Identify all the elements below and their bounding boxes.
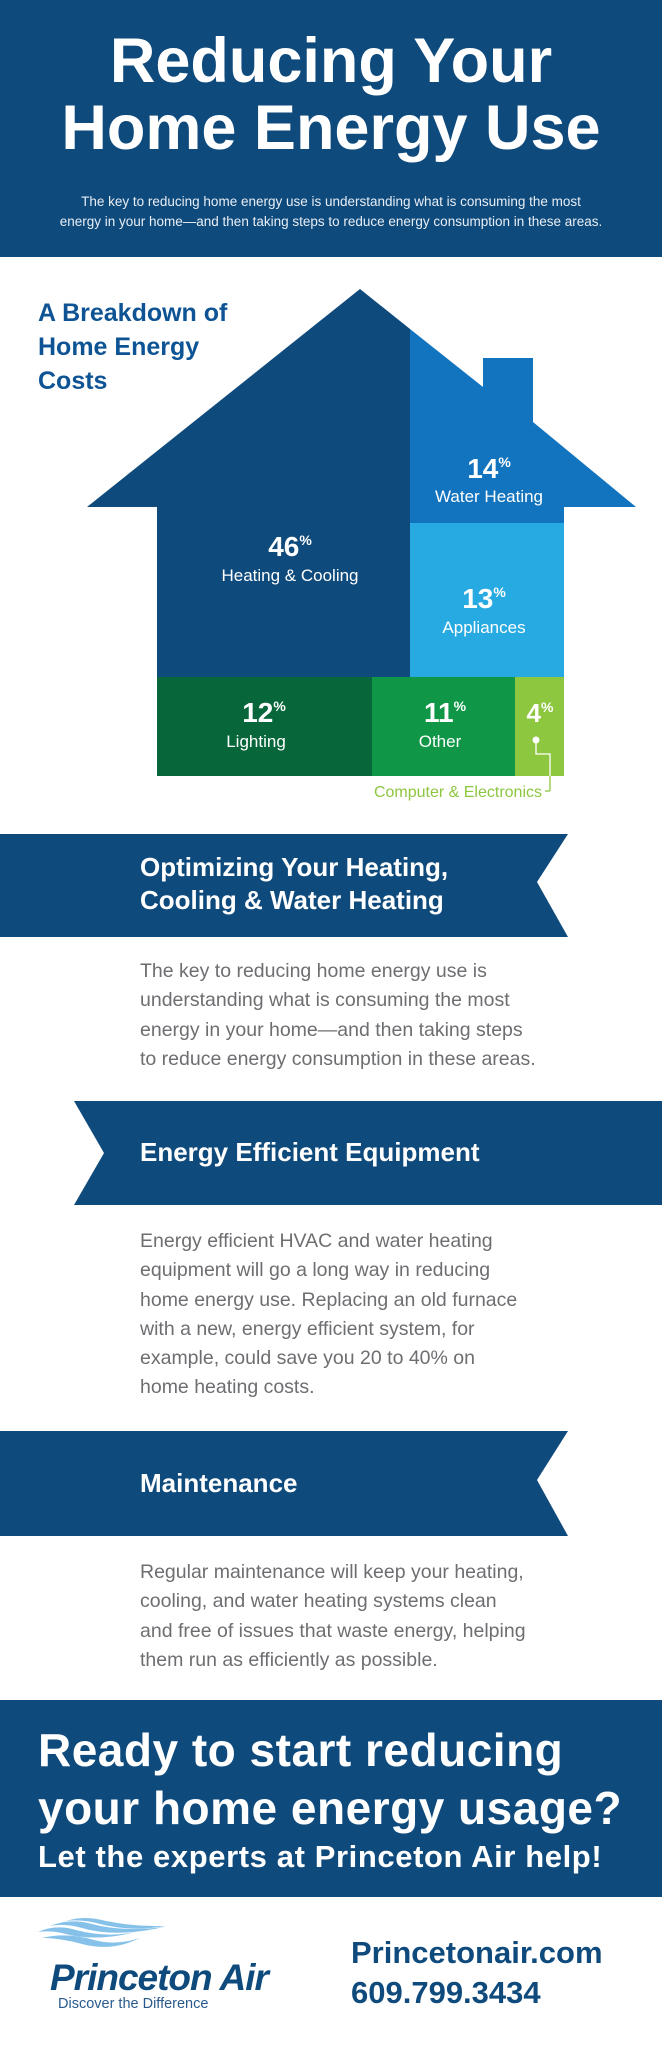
segment: appliances [410, 523, 564, 677]
banner heading: Energy Efficient Equipment [140, 1137, 480, 1167]
section heading: breakdown: Home Energy [38, 333, 199, 361]
segment: heating & cooling: % [299, 532, 312, 548]
segment: other [372, 677, 515, 776]
banner heading: Maintenance [140, 1468, 298, 1498]
paragraph: equipment: Energy efficient HVAC and water heating [140, 1230, 493, 1252]
paragraph: maintenance: them run as efficiently as possible. [140, 1649, 438, 1671]
segment: heating & cooling: 46 [268, 531, 299, 562]
cta subline: Let the experts at Princeton Air help! [38, 1839, 602, 1874]
header band [0, 0, 662, 257]
banner heading [140, 852, 448, 915]
paragraph: optimizing [140, 960, 536, 1070]
section heading: breakdown [38, 299, 228, 395]
segment: water heating [410, 329, 636, 523]
segment: water heating: % [498, 454, 511, 470]
title: Home Energy Use [61, 93, 601, 163]
segment: lighting: 12 [242, 697, 273, 728]
banner heading: Cooling & Water Heating [140, 885, 444, 915]
segment: lighting: % [273, 698, 286, 714]
paragraph: optimizing: energy in your home—and then taking steps [140, 1019, 523, 1041]
subtitle: The key to reducing home energy use is understanding what is consuming the most [81, 194, 581, 209]
banner: optimizing [0, 834, 568, 937]
paragraph: maintenance: cooling, and water heating systems clean [140, 1590, 497, 1612]
segment: other: % [454, 698, 467, 714]
paragraph: equipment [140, 1230, 517, 1398]
cta headline [38, 1724, 622, 1834]
banner: equipment [74, 1101, 662, 1205]
contact info: 609.799.3434 [351, 1975, 541, 2010]
paragraph: maintenance: and free of issues that waste energy, helping [140, 1620, 526, 1642]
segment: water heating: 14 [467, 453, 498, 484]
title: Reducing Your [110, 26, 552, 96]
paragraph: optimizing: to reduce energy consumption in these areas. [140, 1048, 536, 1070]
segment: other: 11 [424, 697, 454, 728]
section heading: breakdown: Costs [38, 367, 107, 395]
paragraph: optimizing: The key to reducing home energy use is [140, 960, 487, 982]
paragraph: maintenance [140, 1561, 526, 1671]
call to action band [0, 1700, 662, 1897]
paragraph: maintenance: Regular maintenance will keep your heating, [140, 1561, 524, 1583]
subtitle: energy in your home—and then taking steps to reduce energy consumption in these areas. [60, 214, 602, 229]
segment: other: Other [419, 732, 462, 751]
paragraph: equipment: equipment will go a long way in reducing [140, 1259, 490, 1281]
logo [38, 1918, 270, 2012]
segment: appliances: Appliances [442, 618, 526, 637]
paragraph: equipment: home heating costs. [140, 1376, 315, 1398]
segment: computer & electronics [374, 677, 564, 801]
segment: lighting: Lighting [226, 732, 286, 751]
cta headline: your home energy usage? [38, 1782, 622, 1834]
contact info [351, 1935, 603, 2010]
segment: water heating: Water Heating [435, 487, 543, 506]
title [61, 26, 601, 163]
segment: computer & electronics: 4 [527, 698, 541, 728]
icon: air swooshes [38, 1918, 166, 1947]
banner: maintenance [0, 1431, 568, 1536]
segment: heating & cooling: Heating & Cooling [221, 566, 359, 585]
cta headline: Ready to start reducing [38, 1724, 563, 1776]
segment: computer & electronics: % [541, 699, 554, 715]
subtitle [60, 194, 602, 229]
section heading: breakdown: A Breakdown of [38, 299, 227, 327]
segment: computer & electronics: Computer & Electronics [374, 784, 542, 801]
paragraph: optimizing: understanding what is consuming the most [140, 989, 510, 1011]
contact info: Princetonair.com [351, 1935, 603, 1970]
paragraph: equipment: home energy use. Replacing an old furnace [140, 1289, 517, 1311]
segment: lighting [157, 677, 372, 776]
paragraph: equipment: example, could save you 20 to 40% on [140, 1347, 475, 1369]
banner heading: Optimizing Your Heating, [140, 852, 448, 882]
logo tagline: Discover the Difference [58, 1996, 208, 2012]
house chart [87, 289, 636, 801]
paragraph: equipment: with a new, energy efficient system, for [140, 1318, 475, 1340]
logo wordmark: Princeton Air [50, 1957, 268, 1998]
segment: appliances: 13 [462, 583, 493, 614]
segment: appliances: % [493, 584, 506, 600]
segment: heating & cooling [87, 289, 410, 677]
